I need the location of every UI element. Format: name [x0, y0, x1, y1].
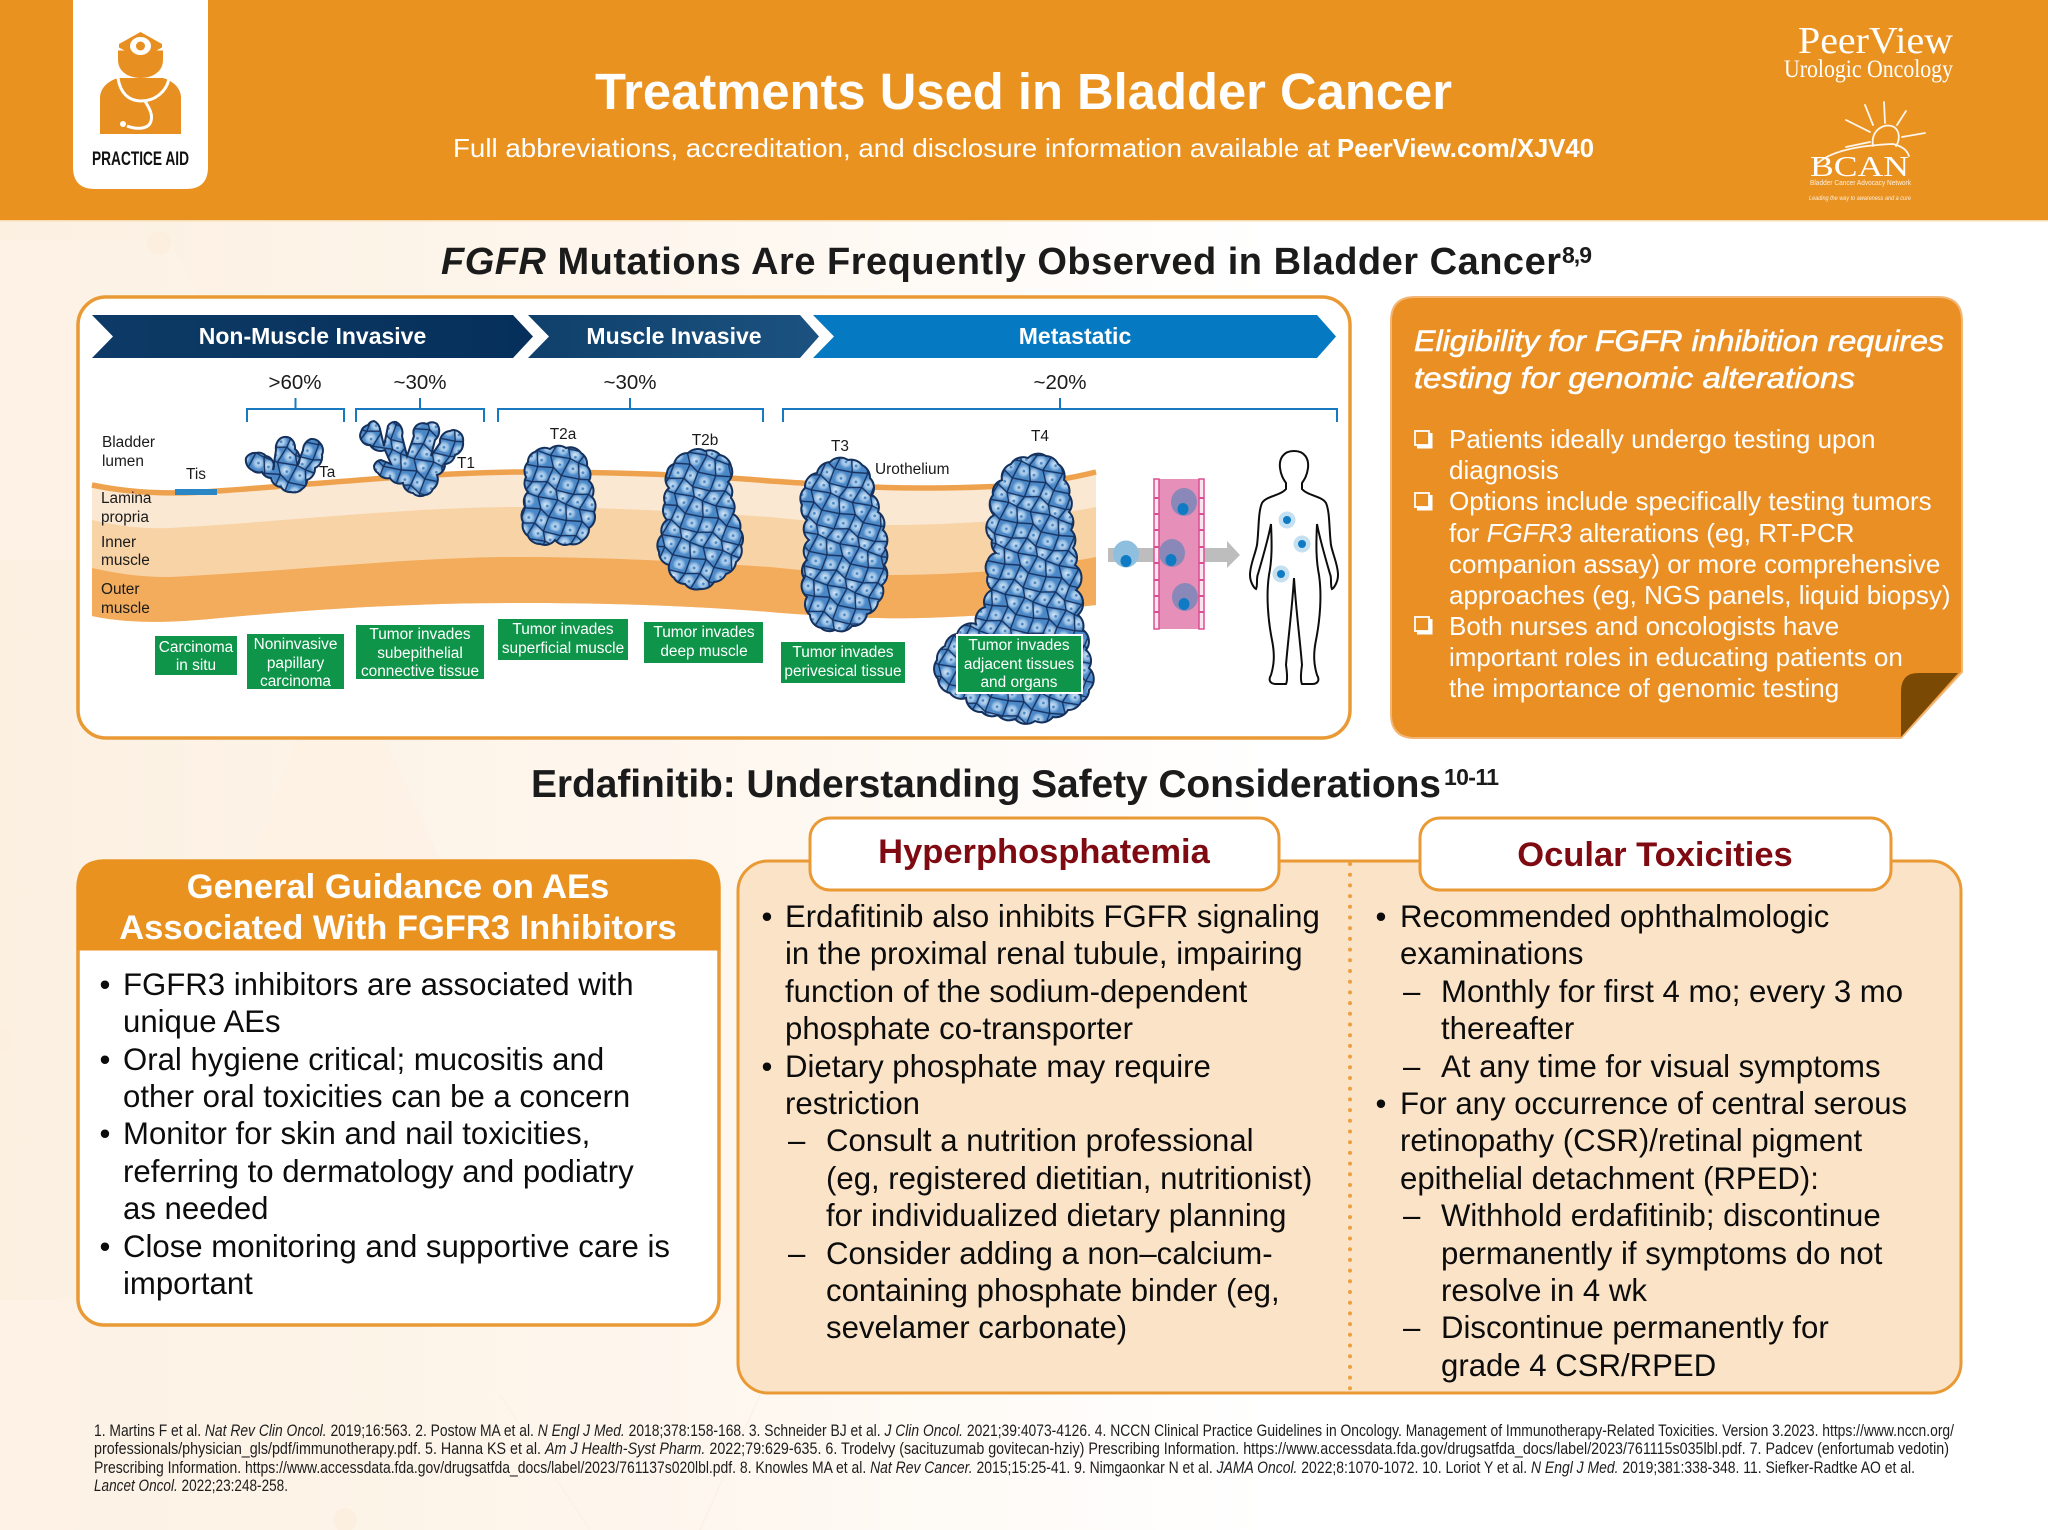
- layer labels: Bladder: [102, 434, 155, 451]
- tumor stage: T3: Urothelium: [875, 461, 949, 478]
- tab: ocular toxicities: Ocular Toxicities: [1517, 836, 1793, 874]
- panel heading: [1414, 325, 1944, 395]
- panel body text: Patients ideally undergo testing upon: [1449, 424, 1875, 454]
- tumor stage: T4: T4: [1031, 428, 1049, 445]
- PeerView logo: [1784, 20, 1954, 83]
- brackets with percentages: ~20%: [1033, 371, 1087, 394]
- heading: FGFR mutations: FGFR Mutations Are Frequently Observed in Bladder Cancer: [441, 241, 1561, 283]
- tumor stage: T4: [934, 428, 1094, 724]
- chevron: non-muscle invasive: Non-Muscle Invasive: [199, 323, 426, 349]
- ocular toxicities bullets: permanently if symptoms do not: [1441, 1236, 1883, 1271]
- label: noninvasive papillary carcinoma: papillary: [267, 655, 324, 672]
- hyperphosphatemia bullets: restriction: [785, 1086, 920, 1121]
- layer labels: muscle: [101, 600, 150, 617]
- label: adjacent tissues and organs: and organs: [980, 674, 1058, 691]
- guidance bullets: •: [100, 1042, 110, 1077]
- guidance bullets: other oral toxicities can be a concern: [123, 1079, 630, 1114]
- brackets with percentages: ~30%: [393, 371, 447, 394]
- panel body text: Options include specifically testing tumors: [1449, 486, 1932, 516]
- BCAN logo: BCAN: [1810, 151, 1909, 183]
- label: subepithelial connective tissue: Tumor invades: [369, 626, 471, 643]
- tumor stage: Tis: Tis: [186, 466, 206, 483]
- hyperphosphatemia bullets: Consider adding a non–calcium-: [826, 1236, 1273, 1271]
- panel: general guidance on AEs: [78, 861, 719, 1325]
- ocular toxicities bullets: thereafter: [1441, 1011, 1574, 1046]
- label: superficial muscle: [498, 619, 628, 660]
- panel: safety considerations: [738, 818, 1961, 1393]
- hyperphosphatemia bullets: Dietary phosphate may require: [785, 1049, 1211, 1084]
- chevron: muscle invasive: [528, 315, 819, 358]
- label: noninvasive papillary carcinoma: [247, 634, 344, 690]
- subtitle: Full abbreviations, accreditation, and disclosure information available at: [453, 133, 1331, 163]
- panel body text: diagnosis: [1449, 455, 1559, 485]
- checkbox bullets: [1415, 431, 1431, 633]
- chevron: metastatic: [813, 315, 1336, 358]
- panel body text: important roles in educating patients on: [1449, 642, 1903, 672]
- label: carcinoma in situ: [155, 636, 237, 675]
- brackets with percentages: >60%: [268, 371, 322, 394]
- hyperphosphatemia bullets: –: [788, 1123, 806, 1158]
- tab: ocular toxicities: [1420, 818, 1891, 890]
- label: carcinoma in situ: in situ: [176, 657, 216, 674]
- brackets with percentages: ~30%: [603, 371, 657, 394]
- panel: eligibility for FGFR inhibition: [1391, 297, 1962, 738]
- guidance bullets: •: [100, 1229, 110, 1264]
- label: perivesical tissue: [781, 642, 905, 683]
- panel heading: Eligibility for FGFR inhibition requires: [1414, 325, 1944, 358]
- guidance bullets: important: [123, 1266, 253, 1301]
- panel heading band: [78, 861, 719, 949]
- title: Treatments Used in Bladder Cancer: [595, 63, 1452, 120]
- ocular toxicities bullets: –: [1403, 1049, 1421, 1084]
- label: deep muscle: Tumor invades: [653, 624, 755, 641]
- heading: FGFR mutations: 8,9: [1562, 242, 1592, 268]
- guidance bullets: as needed: [123, 1191, 268, 1226]
- label: deep muscle: deep muscle: [660, 643, 748, 660]
- tab: hyperphosphatemia: Hyperphosphatemia: [878, 833, 1211, 871]
- label: adjacent tissues and organs: Tumor invades: [968, 637, 1070, 654]
- tumor stage: Ta: [246, 437, 336, 492]
- label: noninvasive papillary carcinoma: carcinoma: [260, 673, 331, 690]
- tumor stage: T3: [800, 438, 949, 631]
- label: superficial muscle: Tumor invades: [512, 621, 614, 638]
- ocular toxicities bullets: grade 4 CSR/RPED: [1441, 1348, 1716, 1383]
- tumor stage: Ta: Ta: [319, 464, 336, 481]
- label: subepithelial connective tissue: [356, 625, 484, 680]
- guidance bullets: •: [100, 967, 110, 1002]
- bladder wall layers: [92, 470, 1096, 622]
- hyperphosphatemia bullets: –: [788, 1236, 806, 1271]
- tumor stage: T2b: [657, 432, 743, 590]
- BCAN logo: [1809, 102, 1925, 202]
- ocular toxicities bullets: Recommended ophthalmologic: [1400, 899, 1829, 934]
- panel: disease stages diagram: [78, 297, 1350, 738]
- label: adjacent tissues and organs: adjacent tissues: [964, 656, 1074, 673]
- folded corner: [1901, 673, 1958, 737]
- panel body text: for FGFR3 alterations (eg, RT-PCR: [1449, 518, 1855, 548]
- tumor stage: T2a: T2a: [550, 426, 577, 443]
- header banner: [0, 0, 2048, 222]
- panel body text: the importance of genomic testing: [1449, 673, 1839, 703]
- icon: human body with metastases: [1250, 451, 1338, 684]
- tumor stage: T2a: [521, 426, 596, 545]
- heading: erdafitinib safety: 10-11: [1444, 764, 1499, 790]
- ocular toxicities bullets: •: [1376, 1086, 1386, 1121]
- layer labels: lumen: [102, 453, 144, 470]
- hyperphosphatemia bullets: containing phosphate binder (eg,: [826, 1273, 1280, 1308]
- references: Lancet Oncol. 2022;23:248-258.: [94, 1477, 288, 1495]
- tumor stage: T1: [360, 421, 475, 496]
- ocular toxicities bullets: Discontinue permanently for: [1441, 1310, 1829, 1345]
- ocular toxicities bullets: At any time for visual symptoms: [1441, 1049, 1881, 1084]
- hyperphosphatemia bullets: for individualized dietary planning: [826, 1198, 1286, 1233]
- layer labels: propria: [101, 509, 149, 526]
- references: Prescribing Information. https://www.accessdata.fda.gov/drugsatfda_docs/label/2023/761137s020lbl.pdf. 8. Knowles MA et al. Nat Rev Cancer. 2015;15:25-41. 9. Nimgaonkar N et al. JAMA Oncol. 2022;8:1070-1072. 10. Loriot Y et al. N Engl J Med. 2019;381:338-348. 11. Siefker-Radtke AO et al.: [94, 1459, 1915, 1477]
- guidance bullets: unique AEs: [123, 1004, 281, 1039]
- panel body text: [1449, 424, 1951, 703]
- label: subepithelial connective tissue: connective tissue: [361, 663, 479, 680]
- panel heading band: Associated With FGFR3 Inhibitors: [119, 909, 677, 947]
- ocular toxicities bullets: [1376, 899, 1907, 1383]
- ocular toxicities bullets: resolve in 4 wk: [1441, 1273, 1647, 1308]
- ocular toxicities bullets: examinations: [1400, 936, 1583, 971]
- practice aid badge: [73, 0, 208, 189]
- layer labels: Outer: [101, 581, 140, 598]
- hyperphosphatemia bullets: sevelamer carbonate): [826, 1310, 1127, 1345]
- guidance bullets: FGFR3 inhibitors are associated with: [123, 967, 634, 1002]
- hyperphosphatemia bullets: (eg, registered dietitian, nutritionist): [826, 1161, 1312, 1196]
- guidance bullets: Oral hygiene critical; mucositis and: [123, 1042, 604, 1077]
- ocular toxicities bullets: For any occurrence of central serous: [1400, 1086, 1907, 1121]
- arrow: metastatic spread through blood vessel: [1108, 479, 1240, 629]
- ocular toxicities bullets: Withhold erdafitinib; discontinue: [1441, 1198, 1881, 1233]
- chevron: non-muscle invasive: [92, 315, 533, 358]
- label: perivesical tissue: perivesical tissue: [784, 663, 902, 680]
- PeerView logo: Urologic Oncology: [1784, 56, 1953, 83]
- label: perivesical tissue: Tumor invades: [792, 644, 894, 661]
- panel heading band: General Guidance on AEs: [187, 868, 609, 906]
- tab: hyperphosphatemia: [810, 818, 1279, 890]
- layer labels: muscle: [101, 552, 150, 569]
- hyperphosphatemia bullets: in the proximal renal tubule, impairing: [785, 936, 1303, 971]
- tumor stage: T3: T3: [831, 438, 849, 455]
- ocular toxicities bullets: Monthly for first 4 mo; every 3 mo: [1441, 974, 1903, 1009]
- ocular toxicities bullets: –: [1403, 1198, 1421, 1233]
- BCAN logo: Bladder Cancer Advocacy Network: [1810, 178, 1911, 187]
- layer labels: Inner: [101, 534, 136, 551]
- layer labels: Lamina: [101, 490, 152, 507]
- panel body text: approaches (eg, NGS panels, liquid biopsy): [1449, 580, 1951, 610]
- hyperphosphatemia bullets: Erdafitinib also inhibits FGFR signaling: [785, 899, 1320, 934]
- panel heading: testing for genomic alterations: [1414, 362, 1855, 395]
- hyperphosphatemia bullets: phosphate co-transporter: [785, 1011, 1133, 1046]
- BCAN logo: Leading the way to awareness and a cure: [1809, 195, 1911, 202]
- subtitle: PeerView.com/XJV40: [1337, 133, 1594, 163]
- chevron: metastatic: Metastatic: [1019, 323, 1131, 349]
- ocular toxicities bullets: •: [1376, 899, 1386, 934]
- ocular toxicities bullets: –: [1403, 1310, 1421, 1345]
- label: adjacent tissues and organs: [957, 635, 1082, 693]
- hyperphosphatemia bullets: [762, 899, 1320, 1345]
- label: deep muscle: [644, 622, 763, 663]
- references: [94, 1422, 1954, 1495]
- ocular toxicities bullets: –: [1403, 974, 1421, 1009]
- ocular toxicities bullets: retinopathy (CSR)/retinal pigment: [1400, 1123, 1862, 1158]
- icon: doctor with head mirror and stethoscope: [100, 32, 181, 134]
- guidance bullets: •: [100, 1116, 110, 1151]
- hyperphosphatemia bullets: •: [762, 1049, 772, 1084]
- panel body text: Both nurses and oncologists have: [1449, 611, 1839, 641]
- guidance bullets: referring to dermatology and podiatry: [123, 1154, 634, 1189]
- tumor stage: Tis: [175, 466, 217, 495]
- label: subepithelial connective tissue: subepithelial: [377, 645, 463, 662]
- label: carcinoma in situ: Carcinoma: [159, 639, 234, 656]
- chevron: muscle invasive: Muscle Invasive: [586, 323, 762, 349]
- label: noninvasive papillary carcinoma: Noninvasive: [254, 636, 337, 653]
- tumor stage: T1: T1: [457, 455, 475, 472]
- PeerView logo: PeerView: [1798, 20, 1954, 62]
- heading: erdafitinib safety: Erdafinitib: Understanding Safety Considerations: [531, 763, 1441, 806]
- guidance bullets: [100, 967, 670, 1301]
- guidance bullets: Monitor for skin and nail toxicities,: [123, 1116, 590, 1151]
- guidance bullets: Close monitoring and supportive care is: [123, 1229, 670, 1264]
- hyperphosphatemia bullets: •: [762, 899, 772, 934]
- ocular toxicities bullets: epithelial detachment (RPED):: [1400, 1161, 1819, 1196]
- tumor stage: T2b: T2b: [692, 432, 718, 449]
- layer labels: [101, 434, 155, 617]
- label: superficial muscle: superficial muscle: [502, 640, 624, 657]
- panel body text: companion assay) or more comprehensive: [1449, 549, 1940, 579]
- practice aid badge: PRACTICE AID: [92, 149, 189, 170]
- hyperphosphatemia bullets: function of the sodium-dependent: [785, 974, 1248, 1009]
- brackets with percentages: [247, 371, 1337, 422]
- hyperphosphatemia bullets: Consult a nutrition professional: [826, 1123, 1254, 1158]
